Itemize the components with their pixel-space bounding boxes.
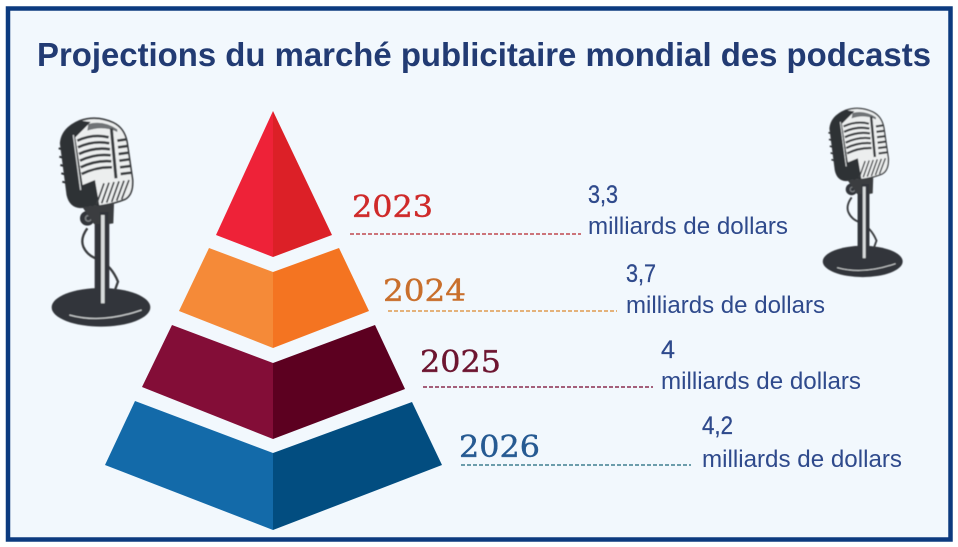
row: 2024 — [383, 260, 825, 319]
pyramid tier: 2023 red — [216, 111, 332, 257]
value 3,7: 3,7 — [626, 260, 656, 288]
value 3,3: 3,3 — [588, 181, 618, 209]
unit text: milliards de dollars — [702, 446, 902, 473]
pyramid tier: 2024 orange — [179, 248, 369, 348]
pyramid chart — [105, 111, 442, 530]
unit text: milliards de dollars — [626, 292, 825, 319]
row: 2023 — [350, 181, 788, 240]
leader line 2025 — [423, 386, 653, 388]
unit text: milliards de dollars — [588, 213, 788, 240]
icon: right microphone — [823, 108, 903, 277]
unit text: milliards de dollars — [661, 368, 861, 395]
leader line 2026 — [461, 464, 691, 466]
value 4: 4 — [661, 336, 675, 364]
leader line 2024 — [388, 310, 617, 312]
year label 2026: 2026 — [459, 430, 540, 465]
leader line 2023 — [350, 233, 581, 235]
icon: left microphone — [52, 118, 150, 327]
value 4,2: 4,2 — [702, 412, 733, 440]
row: 2025 — [420, 336, 861, 395]
year label 2025: 2025 — [420, 345, 501, 380]
year label 2023: 2023 — [352, 190, 433, 225]
pyramid tier: 2026 blue — [105, 401, 442, 530]
title: Projections du marché publicitaire mondial des podcasts — [37, 36, 931, 73]
year label 2024: 2024 — [383, 274, 466, 309]
row: 2026 — [459, 412, 902, 473]
pyramid tier: 2025 maroon — [142, 325, 405, 439]
